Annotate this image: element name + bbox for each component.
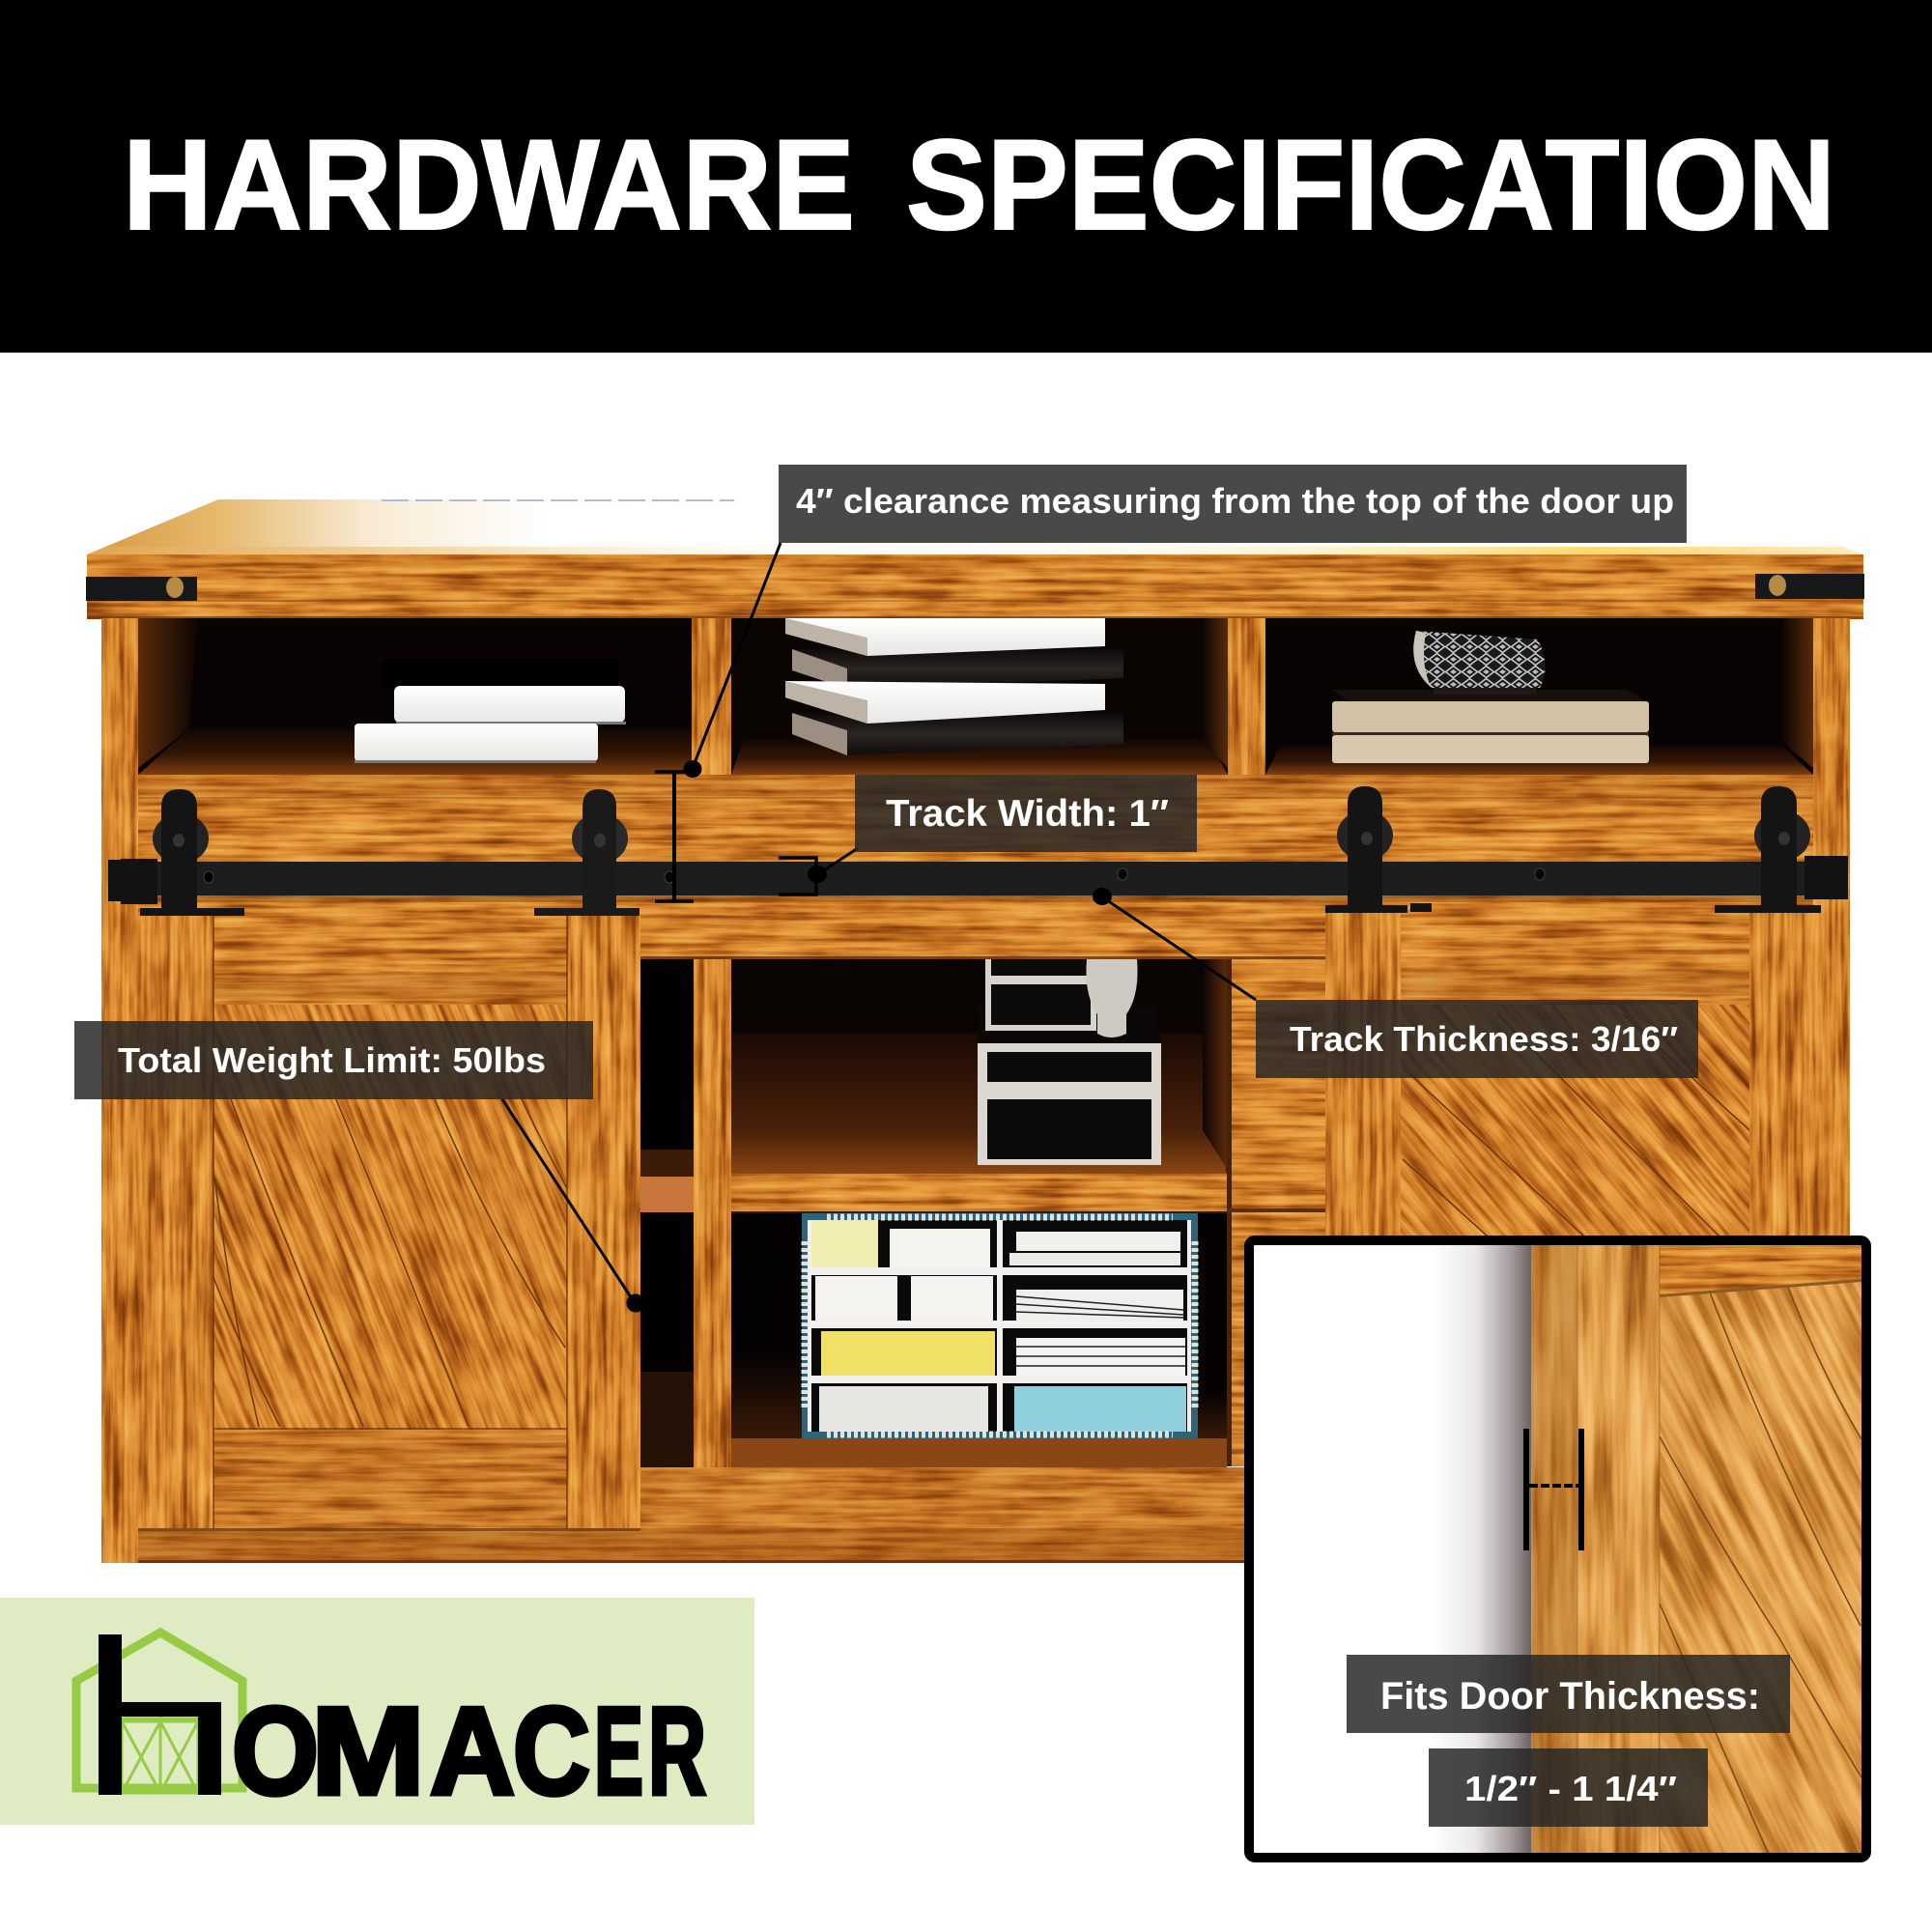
books	[355, 659, 626, 763]
center shelf	[731, 1174, 1227, 1214]
header banner with title	[0, 0, 1932, 353]
diagonal panel	[213, 1005, 567, 1430]
barn door icon	[115, 1715, 203, 1793]
house outline	[76, 1633, 242, 1788]
title	[123, 114, 1835, 257]
callout: fits door thickness	[1347, 1655, 1790, 1733]
left sliding door	[0, 624, 1011, 1801]
wordmark: A	[430, 1682, 515, 1821]
inset image	[1254, 1245, 1861, 1853]
title: SPECIFICATION	[906, 114, 1835, 257]
storage boxes and vase	[978, 959, 1161, 1165]
callout: clearance	[779, 465, 1687, 543]
upper cubby 3	[1265, 618, 1813, 775]
callout: weight limit: Total Weight Limit: 50lbs	[118, 1040, 546, 1080]
speckled edges	[805, 1217, 1195, 1435]
wordmark: E	[594, 1682, 643, 1821]
weight limit leader	[502, 1099, 644, 1312]
hanger 3	[1325, 786, 1432, 913]
cabinet	[86, 499, 1864, 1563]
title: HARDWARE	[123, 114, 855, 257]
end stops	[108, 856, 1848, 904]
wordmark	[232, 1682, 706, 1821]
center lower bay	[731, 1213, 1227, 1467]
hanger 2	[534, 789, 639, 916]
right drawers	[1227, 959, 1333, 1466]
track bar	[130, 862, 1821, 895]
cabinet base	[138, 1467, 1249, 1563]
letter H shape	[99, 1634, 221, 1795]
lower middle opening	[640, 959, 694, 1467]
callout: thickness range	[1429, 1748, 1708, 1827]
strap right	[1755, 574, 1864, 599]
stiles	[138, 916, 213, 1528]
upper cubby 1	[138, 618, 692, 775]
wordmark: C	[513, 1682, 590, 1821]
cabinet top surface	[87, 499, 1863, 554]
right sliding door	[1325, 913, 1813, 1236]
top rail	[1401, 912, 1749, 1014]
callout: track width: Track Width: 1″	[886, 793, 1169, 835]
track thickness leader	[1094, 889, 1256, 1000]
track width marker	[779, 848, 858, 895]
cabinet fascia	[87, 554, 1863, 619]
hanger 4	[1715, 786, 1821, 913]
upper divider 2	[1228, 618, 1265, 778]
callout: thickness range: 1/2″ - 1 1/4″	[1464, 1769, 1677, 1808]
lower post	[694, 959, 731, 1467]
track and hangers	[108, 786, 1848, 916]
callout: track thickness: Track Thickness: 3/16″	[1290, 1019, 1678, 1059]
door thickness marker	[1523, 1429, 1584, 1550]
inset border	[1249, 1240, 1866, 1858]
callout: track width	[855, 775, 1197, 852]
hanger 1	[140, 789, 244, 916]
callout: weight limit	[74, 1021, 593, 1099]
inset: door thickness detail	[1244, 1236, 1871, 1862]
track bolts	[204, 868, 1545, 883]
upper divider 1	[692, 618, 731, 778]
paper stacks	[811, 1220, 1186, 1432]
callout: clearance: 4″ clearance measuring from the top of the door up	[796, 481, 1674, 521]
book stack	[785, 618, 1123, 755]
center upper bay	[731, 959, 1227, 1174]
paper organizer	[802, 1213, 1198, 1438]
wordmark: O	[232, 1682, 319, 1821]
wordmark: M	[311, 1682, 425, 1821]
wordmark: R	[648, 1682, 706, 1821]
tan books	[1332, 690, 1649, 763]
callout: fits door thickness: Fits Door Thickness:	[1380, 1675, 1760, 1718]
callout: track thickness	[1256, 1000, 1698, 1078]
top and bottom rails	[213, 916, 567, 1022]
clearance measurement marker	[655, 543, 781, 901]
logo panel	[0, 1598, 754, 1825]
upper cubby 2	[731, 618, 1228, 775]
strap left	[86, 577, 197, 601]
organizer shelves	[808, 1220, 1191, 1432]
stiles	[1325, 912, 1401, 1240]
diagonal panel	[1401, 1005, 1749, 1236]
side posts	[101, 618, 1850, 1563]
patterned basket	[1413, 631, 1546, 695]
upper rail	[138, 775, 1813, 959]
